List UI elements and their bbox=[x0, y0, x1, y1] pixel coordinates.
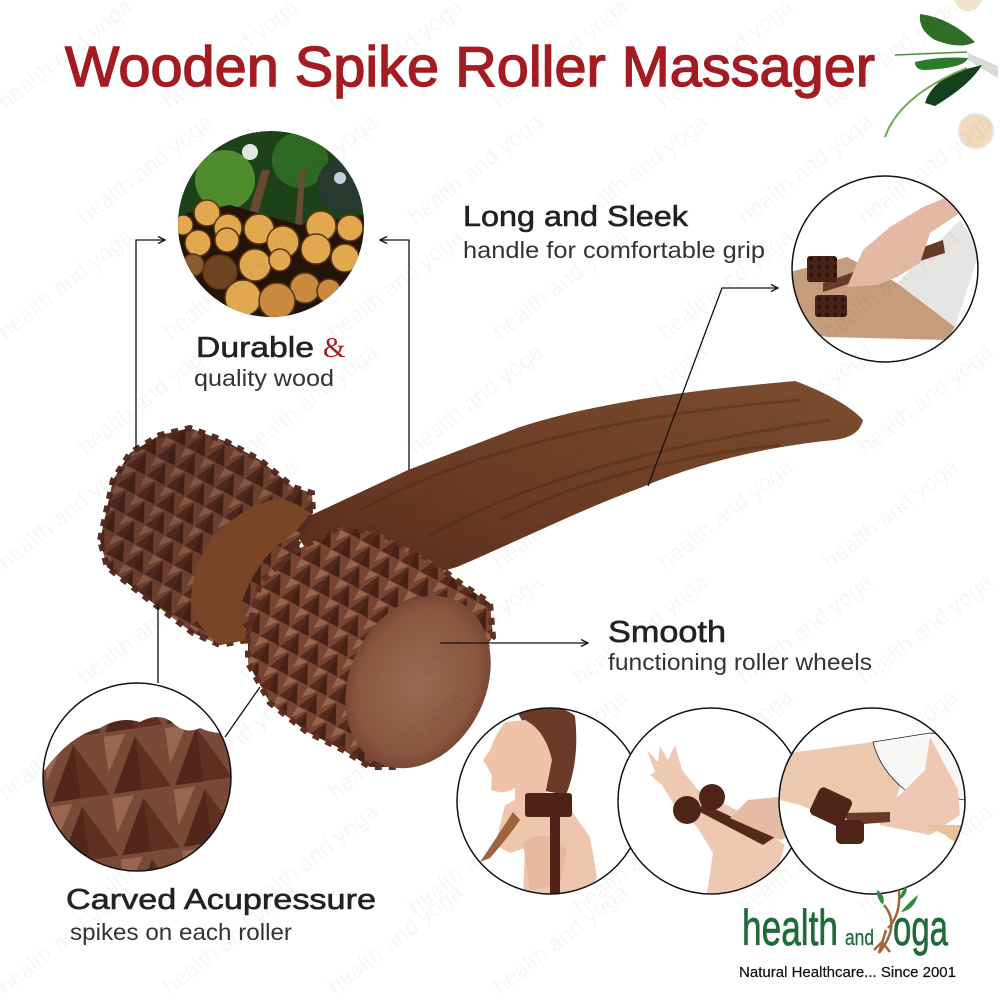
photo: roller on wrist bbox=[630, 745, 786, 893]
watermark: health and yoga pattern: health and yoga bbox=[488, 223, 633, 344]
label: durable and quality wood bbox=[194, 332, 346, 391]
watermark: health and yoga pattern: health and yoga bbox=[238, 568, 383, 689]
watermark: health and yoga pattern: health and yoga bbox=[323, 878, 468, 999]
photo: roller on arm bbox=[780, 732, 964, 848]
watermark: health and yoga pattern: health and yoga bbox=[488, 453, 633, 574]
label: durable and quality wood: quality wood bbox=[194, 365, 334, 391]
watermark: health and yoga pattern: health and yoga bbox=[73, 798, 218, 919]
label: long and sleek bbox=[463, 201, 765, 263]
watermark: health and yoga pattern: health and yoga bbox=[158, 453, 303, 574]
handle grain bbox=[360, 400, 830, 535]
circle outline: grip photo bbox=[792, 176, 978, 362]
watermark: health and yoga pattern: health and yoga bbox=[853, 798, 998, 919]
watermark: health and yoga pattern: health and yoga bbox=[323, 453, 468, 574]
handle bbox=[290, 381, 863, 600]
circle outline: wrist photo bbox=[618, 708, 804, 894]
logo: health and yoga: health bbox=[742, 900, 838, 956]
photo: hand holding roller on thigh bbox=[792, 198, 977, 340]
circle outline: neck photo bbox=[457, 708, 643, 894]
watermark: health and yoga pattern: health and yoga bbox=[158, 878, 303, 999]
watermark: health and yoga pattern: health and yoga bbox=[403, 108, 548, 229]
label: long and sleek: Long and Sleek bbox=[463, 201, 689, 233]
watermark: health and yoga pattern: health and yoga bbox=[853, 338, 998, 459]
watermark: health and yoga pattern: health and yoga bbox=[403, 338, 548, 459]
watermark: health and yoga pattern: health and yoga bbox=[158, 223, 303, 344]
label: smooth: functioning roller wheels bbox=[608, 649, 872, 675]
watermark: health and yoga pattern: health and yoga bbox=[653, 223, 798, 344]
watermark: health and yoga pattern: health and yoga bbox=[818, 453, 963, 574]
watermark: health and yoga pattern: health and yoga bbox=[568, 108, 713, 229]
watermark: health and yoga pattern: health and yoga bbox=[568, 798, 713, 919]
arrow: cap to smooth label bbox=[440, 642, 588, 644]
watermark: health and yoga pattern: health and yoga bbox=[403, 568, 548, 689]
watermark: health and yoga pattern: health and yoga bbox=[158, 683, 303, 804]
watermark: health and yoga pattern: health and yoga bbox=[818, 683, 963, 804]
circle outline: close-up bbox=[43, 683, 231, 871]
product: wooden spike roller bbox=[100, 381, 863, 793]
label: smooth: Smooth bbox=[608, 614, 726, 649]
arrow: roller to wood, right bbox=[380, 240, 409, 470]
watermark: health and yoga pattern: health and yoga bbox=[488, 683, 633, 804]
watermark: health and yoga pattern: health and yoga bbox=[488, 878, 633, 999]
watermark: health and yoga pattern: health and yoga bbox=[818, 223, 963, 344]
watermark: health and yoga pattern: health and yoga bbox=[853, 568, 998, 689]
label: durable and quality wood: & bbox=[323, 332, 346, 364]
circle outline: arm photo bbox=[779, 708, 965, 894]
watermark: health and yoga pattern: health and yoga bbox=[323, 223, 468, 344]
watermark: health and yoga pattern: health and yoga bbox=[733, 338, 878, 459]
icon: leaves and candles decoration bbox=[885, 0, 998, 148]
watermark: health and yoga pattern: health and yoga bbox=[323, 683, 468, 804]
label: carved acupressure: spikes on each roller bbox=[70, 919, 292, 945]
left roller bbox=[100, 428, 313, 645]
logo: health and yoga: oga bbox=[893, 900, 948, 956]
watermark: health and yoga pattern: health and yoga bbox=[403, 798, 548, 919]
watermark: health and yoga pattern: health and yoga bbox=[73, 108, 218, 229]
watermark: health and yoga pattern: health and yoga bbox=[853, 108, 998, 229]
watermark: health and yoga pattern: health and yoga bbox=[733, 798, 878, 919]
arrow: roller to wood, left bbox=[136, 240, 165, 448]
photo: spike close-up bbox=[44, 717, 230, 870]
logo: health and yoga: Natural Healthcare... Since 2001 bbox=[739, 964, 956, 981]
watermark: health and yoga pattern: health and yoga bbox=[73, 338, 218, 459]
watermark: health and yoga pattern: health and yoga bbox=[568, 568, 713, 689]
label: carved acupressure bbox=[66, 884, 376, 945]
logo: health and yoga: and bbox=[845, 925, 874, 950]
watermark: health and yoga pattern: health and yoga bbox=[733, 568, 878, 689]
right roller bbox=[248, 527, 519, 793]
axle bbox=[232, 530, 330, 630]
title: Wooden Spike Roller Massager bbox=[65, 35, 875, 99]
watermark: health and yoga pattern: health and yoga bbox=[238, 108, 383, 229]
watermark: health and yoga pattern: health and yoga bbox=[238, 798, 383, 919]
label: durable and quality wood: Durable bbox=[196, 332, 314, 364]
photo: stacked logs under forest bbox=[173, 131, 373, 319]
line: left roller to close-up bbox=[157, 604, 159, 683]
watermark: health and yoga pattern: health and yoga bbox=[568, 338, 713, 459]
watermark: health and yoga pattern: health and yoga bbox=[73, 568, 218, 689]
arrow: handle to grip photo bbox=[648, 288, 778, 486]
line: right roller to close-up bbox=[225, 687, 260, 737]
label: carved acupressure: Carved Acupressure bbox=[66, 884, 376, 916]
watermark: health and yoga pattern: health and yoga bbox=[733, 108, 878, 229]
logo: health and yoga bbox=[739, 886, 956, 981]
label: long and sleek: handle for comfortable grip bbox=[463, 237, 765, 263]
label: smooth bbox=[608, 614, 872, 675]
photo: roller on neck bbox=[480, 708, 597, 894]
watermark: health and yoga pattern: health and yoga bbox=[653, 683, 798, 804]
watermark: health and yoga pattern: health and yoga bbox=[238, 338, 383, 459]
watermark: health and yoga pattern: health and yoga bbox=[653, 453, 798, 574]
